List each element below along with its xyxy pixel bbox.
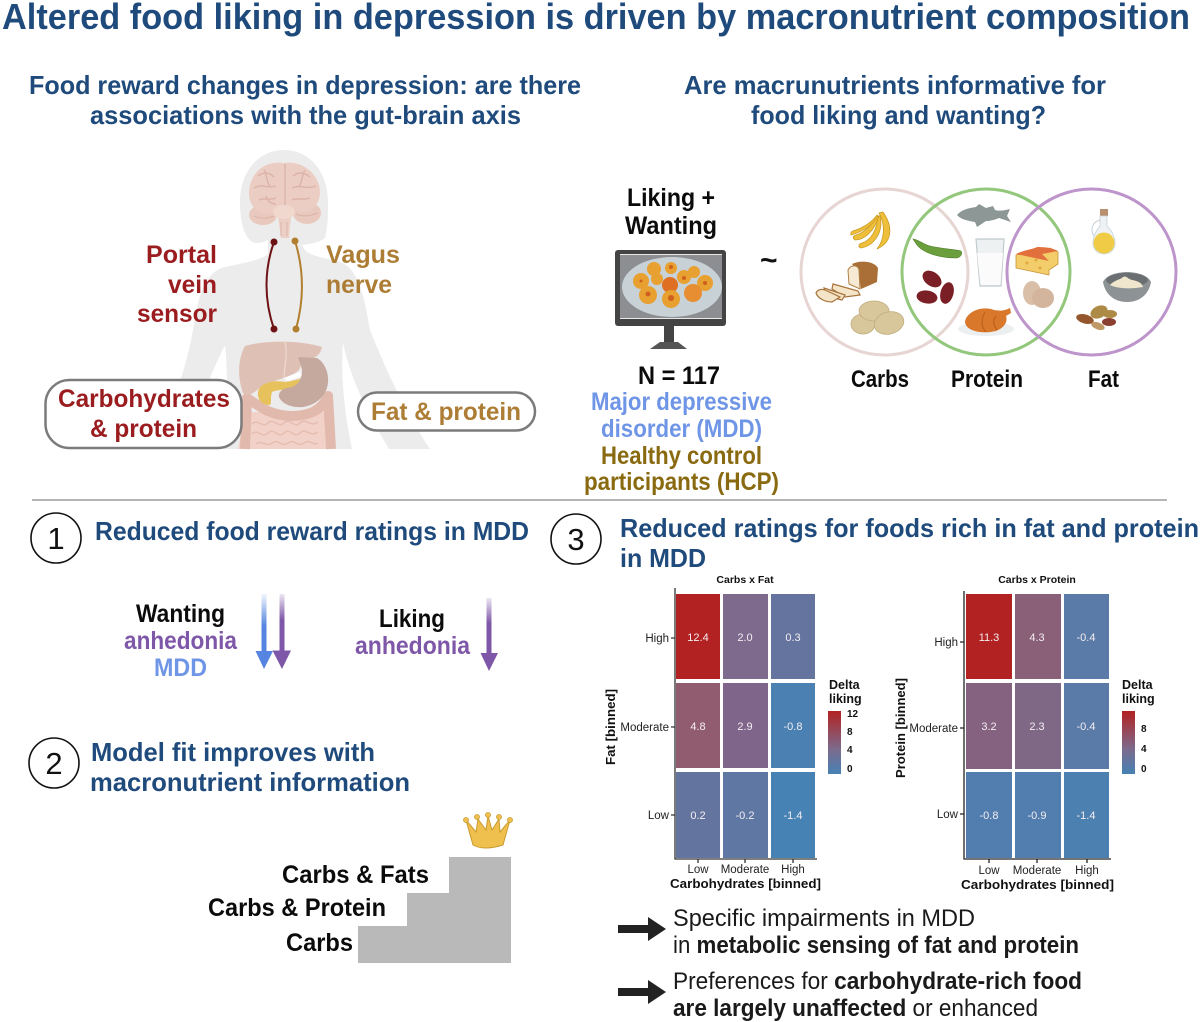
arrow: purple down bbox=[272, 594, 291, 669]
heatmap: carbs x fat: 0.3 bbox=[785, 632, 801, 644]
label: portal vein sensor: Portal bbox=[146, 241, 217, 269]
label: healthy control participants: Healthy control bbox=[601, 442, 762, 470]
heatmap: carbs x protein bbox=[894, 574, 1114, 892]
label: portal vein sensor: sensor bbox=[137, 300, 217, 328]
circle: protein bbox=[902, 189, 1070, 355]
callout: fat and protein bbox=[358, 392, 535, 430]
legend: delta liking, carbs x fat bbox=[828, 678, 862, 775]
callout: fat and protein: Fat & protein bbox=[371, 398, 521, 426]
arrow: blue down bbox=[256, 594, 273, 669]
legend: delta liking, carbs x protein: 8 bbox=[1141, 724, 1147, 735]
heatmap: carbs x protein: -0.4 bbox=[1077, 632, 1095, 644]
icon: fish bbox=[957, 204, 1011, 227]
circle: carbs bbox=[801, 189, 968, 355]
legend: delta liking, carbs x protein bbox=[1122, 678, 1155, 775]
label: vagus nerve bbox=[326, 241, 400, 299]
label: healthy control participants bbox=[584, 442, 779, 496]
heatmap: carbs x fat: -0.2 bbox=[736, 810, 754, 822]
heatmap: carbs x protein: Carbs x Protein bbox=[998, 574, 1076, 586]
legend: delta liking, carbs x protein: Delta bbox=[1122, 678, 1154, 692]
text: conclusion 1 bbox=[673, 905, 1079, 959]
label: liking and wanting: Liking + bbox=[627, 184, 715, 212]
icon: chicken bbox=[958, 308, 1014, 336]
legend: delta liking, carbs x fat: 12 bbox=[847, 709, 859, 720]
heatmap: carbs x protein: Moderate bbox=[909, 723, 958, 735]
heading 2: Model fit improves with bbox=[91, 737, 375, 767]
panel: macronutrient venn diagram bbox=[801, 189, 1176, 393]
text: conclusion 2: Preferences for carbohydrate-rich food bbox=[673, 968, 1082, 995]
heatmap: carbs x protein: Protein [binned] bbox=[894, 678, 908, 778]
label: liking anhedonia bbox=[355, 605, 471, 660]
text: conclusion 1: Specific impairments in MDD bbox=[673, 905, 975, 932]
heatmap: carbs x protein: 11.3 bbox=[979, 632, 999, 644]
vagus nerve line bbox=[292, 238, 302, 332]
label: major depressive disorder bbox=[591, 388, 772, 443]
callout: carbohydrates and protein bbox=[46, 380, 242, 448]
icon: kidney beans bbox=[916, 267, 956, 305]
heatmap: carbs x fat: 4.8 bbox=[690, 721, 706, 733]
heatmap: carbs x protein: High bbox=[1075, 865, 1099, 877]
label: protein: Protein bbox=[951, 366, 1023, 393]
heatmap: carbs x protein: High bbox=[934, 637, 958, 649]
heatmap: carbs x fat: High bbox=[781, 864, 805, 876]
heatmap: carbs x protein: 2.3 bbox=[1029, 721, 1045, 733]
icon: bowl of butter bbox=[1103, 272, 1151, 302]
icon: crown bbox=[464, 812, 512, 848]
heading: food reward changes: associations with the gut-brain axis bbox=[90, 100, 521, 130]
heatmap: carbs x protein: 4.3 bbox=[1029, 632, 1045, 644]
portal vein line bbox=[266, 238, 278, 332]
legend: delta liking, carbs x fat: 4 bbox=[847, 745, 853, 756]
icon: eggs bbox=[1023, 281, 1054, 308]
icon: oil bottle bbox=[1092, 209, 1115, 254]
callout: carbohydrates and protein: Carbohydrates bbox=[58, 385, 230, 413]
stair steps bbox=[358, 857, 511, 963]
icon: nuts bbox=[1075, 303, 1117, 332]
icon: monitor with food image bbox=[615, 250, 726, 349]
icon: pea pod bbox=[913, 239, 962, 258]
panel: gut-brain axis body diagram bbox=[46, 150, 535, 449]
heatmap: carbs x fat: 2.0 bbox=[737, 632, 753, 644]
label: major depressive disorder: Major depressive bbox=[591, 388, 772, 416]
heading: macronutrients informative bbox=[684, 70, 1106, 130]
text: conclusion 2: are largely unaffected or enhanced bbox=[673, 995, 1038, 1022]
label: liking and wanting: Wanting bbox=[625, 212, 717, 240]
heading: food reward changes: Food reward changes in depression: are there bbox=[29, 70, 581, 100]
label: liking anhedonia: Liking bbox=[379, 605, 445, 633]
heatmap: carbs x fat: High bbox=[645, 633, 669, 645]
heatmap: carbs x fat: Carbohydrates [binned] bbox=[670, 877, 821, 891]
label: carbs and protein: Carbs & Protein bbox=[208, 894, 386, 922]
legend: delta liking, carbs x fat: 8 bbox=[847, 727, 853, 738]
heatmap: carbs x protein: -1.4 bbox=[1077, 810, 1095, 822]
heading 3 bbox=[620, 513, 1199, 573]
label: wanting anhedonia MDD: anhedonia bbox=[124, 627, 238, 655]
brain bbox=[249, 163, 321, 238]
heatmap: carbs x protein: -0.9 bbox=[1028, 810, 1046, 822]
heatmap: carbs x fat: -1.4 bbox=[784, 810, 802, 822]
heatmap: carbs x protein: Moderate bbox=[1013, 865, 1061, 877]
arrow: conclusion 1 bbox=[618, 917, 666, 941]
tilde symbol: ~ bbox=[760, 244, 778, 277]
callout: carbohydrates and protein: & protein bbox=[90, 415, 197, 443]
heading 2: macronutrient information bbox=[90, 767, 410, 797]
number badge 2: 2 bbox=[45, 746, 63, 781]
heading 3: Reduced ratings for foods rich in fat and protein bbox=[620, 513, 1199, 543]
heading: macronutrients informative: Are macrunutrients informative for bbox=[684, 70, 1106, 100]
heatmap: carbs x protein: Low bbox=[978, 865, 1000, 877]
panel 3: reduced ratings for fat and protein bbox=[551, 513, 1199, 1022]
number badge 1 bbox=[31, 513, 81, 563]
number badge 3: 3 bbox=[567, 522, 585, 557]
label: healthy control participants: participants (HCP) bbox=[584, 468, 779, 496]
label: liking anhedonia: anhedonia bbox=[355, 632, 471, 660]
label: liking and wanting bbox=[625, 184, 717, 240]
legend: delta liking, carbs x fat: Delta bbox=[829, 678, 861, 692]
heatmap: carbs x protein: Carbohydrates [binned] bbox=[961, 878, 1114, 892]
text: conclusion 1: in metabolic sensing of fat and protein bbox=[673, 932, 1079, 959]
panel: study design bbox=[584, 184, 779, 496]
organs: liver, stomach, pancreas, intestines bbox=[238, 342, 335, 449]
heatmap: carbs x fat: -0.8 bbox=[784, 721, 802, 733]
heatmap: carbs x fat: Fat [binned] bbox=[604, 689, 618, 765]
heatmap: carbs x protein: -0.4 bbox=[1077, 721, 1095, 733]
heading: macronutrients informative: food liking and wanting? bbox=[751, 100, 1046, 130]
label: vagus nerve: nerve bbox=[326, 271, 392, 299]
label: portal vein sensor bbox=[137, 241, 217, 328]
icon: cheese bbox=[1016, 247, 1058, 275]
icon: bread bbox=[816, 262, 878, 302]
panel 2: model fit bbox=[29, 737, 512, 963]
heatmap: carbs x fat: 0.2 bbox=[690, 810, 706, 822]
legend: delta liking, carbs x protein: 4 bbox=[1141, 744, 1147, 755]
heatmap: carbs x fat: 12.4 bbox=[687, 632, 709, 644]
number badge 2 bbox=[29, 738, 79, 788]
heading: food reward changes bbox=[29, 70, 581, 130]
label: major depressive disorder: disorder (MDD) bbox=[601, 415, 762, 443]
label: wanting anhedonia MDD: Wanting bbox=[136, 600, 225, 628]
heatmap: carbs x fat: 2.9 bbox=[737, 721, 753, 733]
heading 1: Reduced food reward ratings in MDD bbox=[95, 516, 529, 546]
heading 2 bbox=[90, 737, 410, 797]
text: conclusion 2 bbox=[673, 968, 1082, 1022]
arrow: purple down bbox=[480, 598, 498, 671]
number badge 1: 1 bbox=[47, 521, 65, 556]
heatmap: carbs x fat: Carbs x Fat bbox=[716, 574, 774, 586]
heatmap: carbs x fat bbox=[604, 574, 821, 891]
label: portal vein sensor: vein bbox=[168, 271, 217, 299]
label: wanting anhedonia MDD bbox=[124, 600, 238, 682]
icon: milk glass bbox=[976, 239, 1004, 286]
legend: delta liking, carbs x protein: liking bbox=[1122, 692, 1155, 706]
label: wanting anhedonia MDD: MDD bbox=[154, 654, 207, 682]
heatmap: carbs x fat: Low bbox=[648, 810, 670, 822]
heatmap: carbs x fat: Low bbox=[687, 864, 709, 876]
heatmap: carbs x fat: Moderate bbox=[620, 722, 669, 734]
heatmap: carbs x fat: Moderate bbox=[721, 864, 769, 876]
label: fat: Fat bbox=[1088, 366, 1119, 393]
legend: delta liking, carbs x fat: liking bbox=[829, 692, 862, 706]
circle: fat bbox=[1007, 189, 1176, 355]
label: carbs: Carbs bbox=[286, 929, 353, 957]
heading 3: in MDD bbox=[620, 543, 706, 573]
sample size: N = 117 bbox=[638, 362, 720, 390]
label: carbs and fats: Carbs & Fats bbox=[282, 861, 429, 889]
body silhouette bbox=[153, 150, 430, 449]
number badge 3 bbox=[551, 514, 601, 564]
legend: delta liking, carbs x fat: 0 bbox=[847, 764, 853, 775]
heatmap: carbs x protein: 3.2 bbox=[981, 721, 997, 733]
label: vagus nerve: Vagus bbox=[326, 241, 400, 269]
legend: delta liking, carbs x protein: 0 bbox=[1141, 764, 1147, 775]
panel 1: reduced food reward ratings bbox=[31, 513, 529, 682]
heatmap: carbs x protein: Low bbox=[937, 809, 959, 821]
icon: potatoes bbox=[851, 301, 906, 338]
icon: banana bbox=[851, 212, 890, 249]
label: carbs: Carbs bbox=[851, 366, 909, 393]
arrow: conclusion 2 bbox=[618, 980, 666, 1004]
heatmap: carbs x protein: -0.8 bbox=[980, 810, 998, 822]
